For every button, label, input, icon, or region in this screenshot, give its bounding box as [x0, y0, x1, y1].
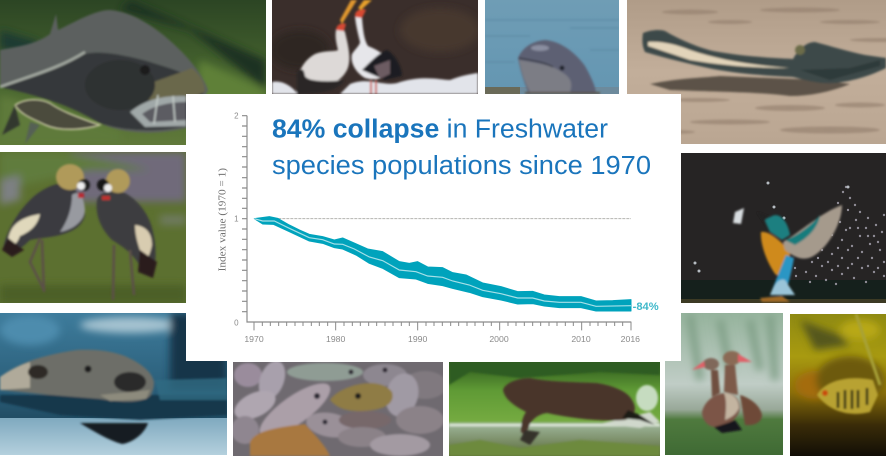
x axis labels: 1990 [408, 335, 428, 344]
index trend line [254, 219, 631, 306]
photo: gharial [627, 0, 886, 144]
photo: eels [233, 362, 443, 456]
end value label: -84% [633, 301, 659, 313]
confidence band [254, 217, 631, 311]
photo: whistling ducks [665, 313, 783, 455]
photo: river dolphin [485, 0, 619, 94]
photo: crowned cranes [0, 152, 186, 303]
y axis labels [234, 112, 239, 327]
x axis labels: 1970 [244, 335, 264, 344]
photo: catfish [0, 0, 266, 145]
photo: storks [272, 0, 478, 94]
title: 84% collapse in Freshwater [272, 116, 601, 144]
title: species populations since 1970 [272, 152, 651, 180]
x axis labels: 1980 [326, 335, 346, 344]
photo: yellow fish [790, 314, 886, 456]
x axis labels: 2010 [571, 335, 591, 344]
y axis labels: 0 [234, 318, 239, 327]
x axis labels [244, 335, 641, 344]
line chart: freshwater index 1970-2016 [217, 112, 659, 344]
photo: otter [0, 313, 227, 455]
x axis labels: 2000 [489, 335, 509, 344]
y axis labels: 1 [234, 215, 239, 224]
y axis with ticks [242, 116, 631, 322]
photo: kingfisher [681, 153, 886, 303]
water splash [795, 187, 884, 284]
x axis ticks [254, 322, 631, 330]
y axis title: Index value (1970 = 1) [217, 168, 228, 271]
y axis labels: 2 [234, 112, 239, 121]
photo: capybara [449, 362, 660, 456]
x axis labels: 2016 [621, 335, 641, 344]
reference line at index 1 [254, 217, 631, 220]
panel: white chart card [186, 94, 681, 361]
